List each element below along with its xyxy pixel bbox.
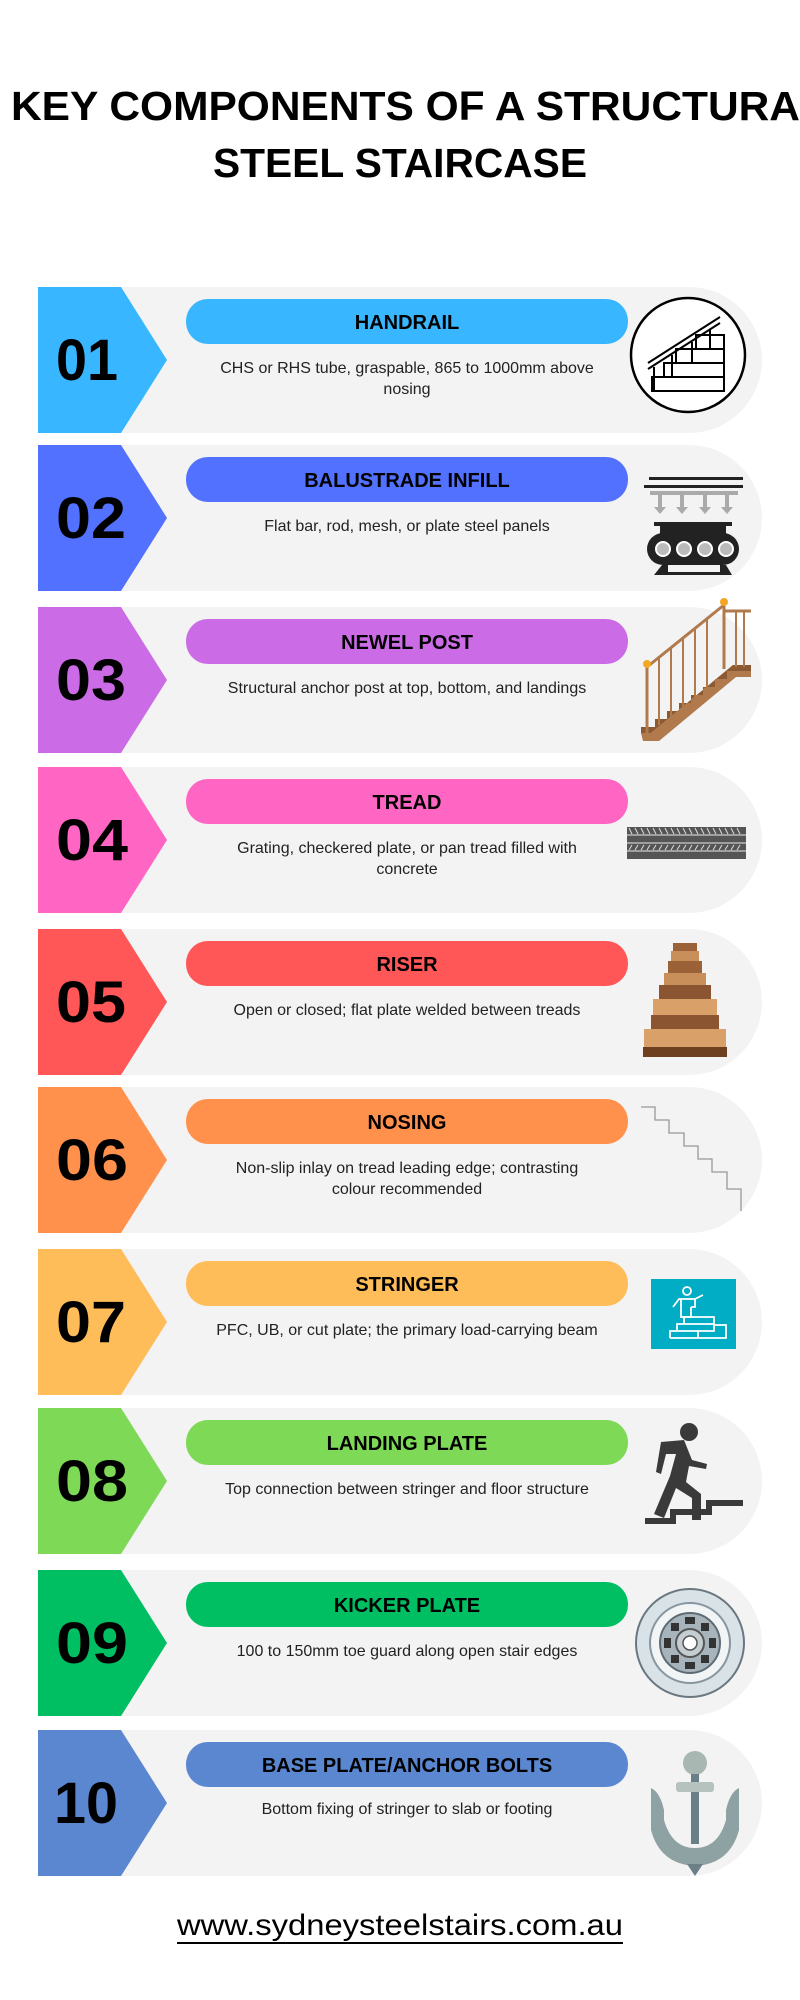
pill: KICKER PLATE [186, 1582, 628, 1627]
heading: TREAD: TREAD [373, 792, 441, 814]
title: STEEL STAIRCASE [213, 140, 587, 186]
icon: person climbing stairs [645, 1423, 743, 1524]
description 07: PFC, UB, or cut plate; the primary load-carrying beam [216, 1322, 598, 1339]
pill: TREAD [186, 779, 628, 824]
chevron 05 [38, 929, 167, 1075]
icon: teal stair climber [651, 1279, 736, 1349]
icon: grating strip [627, 827, 746, 859]
heading: NOSING: NOSING [368, 1112, 446, 1134]
number 04: 04 [56, 808, 128, 873]
title: KEY COMPONENTS OF A STRUCTURA [11, 83, 800, 129]
description 04: Grating, checkered plate, or pan tread filled with [237, 840, 577, 857]
number 03: 03 [56, 648, 126, 713]
chevron 09 [38, 1570, 167, 1716]
description 05: Open or closed; flat plate welded between treads [234, 1002, 580, 1019]
description 04: concrete [376, 861, 438, 878]
heading: HANDRAIL: HANDRAIL [355, 312, 459, 334]
pill: BALUSTRADE INFILL [186, 457, 628, 502]
number 07: 07 [56, 1290, 126, 1355]
number 01: 01 [56, 328, 118, 393]
panel: 05 riser [38, 929, 762, 1075]
number 10: 10 [54, 1771, 118, 1836]
pill: NEWEL POST [186, 619, 628, 664]
heading: LANDING PLATE: LANDING PLATE [327, 1433, 487, 1455]
description 06: colour recommended [332, 1181, 482, 1198]
heading: BASE PLATE/ANCHOR BOLTS: BASE PLATE/ANCHOR BOLTS [262, 1755, 552, 1777]
panel: 01 handrail [38, 287, 762, 433]
number 06: 06 [56, 1128, 128, 1193]
heading: STRINGER: STRINGER [355, 1274, 459, 1296]
description 06: Non-slip inlay on tread leading edge; contrasting [236, 1160, 578, 1177]
chevron 02 [38, 445, 167, 591]
icon: wooden riser stack [643, 943, 727, 1057]
icon: conveyor [644, 477, 743, 575]
number 05: 05 [56, 970, 126, 1035]
icon: anchor [651, 1751, 739, 1876]
pill: LANDING PLATE [186, 1420, 628, 1465]
chevron 04 [38, 767, 167, 913]
panel: 06 nosing [38, 1087, 762, 1233]
description 08: Top connection between stringer and floor structure [225, 1481, 589, 1498]
description 01: nosing [383, 381, 431, 398]
panel: 03 newel post [38, 598, 762, 753]
description 10: Bottom fixing of stringer to slab or footing [262, 1801, 552, 1818]
pill: HANDRAIL [186, 299, 628, 344]
number 08: 08 [56, 1449, 128, 1514]
chevron 03 [38, 607, 167, 753]
chevron 07 [38, 1249, 167, 1395]
icon: wooden staircase [641, 598, 751, 741]
description 03: Structural anchor post at top, bottom, and landings [228, 680, 586, 697]
icon: clutch disc [636, 1589, 744, 1697]
heading: BALUSTRADE INFILL: BALUSTRADE INFILL [304, 470, 510, 492]
pill: RISER [186, 941, 628, 986]
description 09: 100 to 150mm toe guard along open stair edges [237, 1643, 577, 1660]
description 01: CHS or RHS tube, graspable, 865 to 1000mm above [220, 360, 594, 377]
footer url: www.sydneysteelstairs.com.au [176, 1909, 623, 1942]
panel: 02 balustrade infill [38, 445, 762, 591]
number 02: 02 [56, 486, 126, 551]
chevron 08 [38, 1408, 167, 1554]
chevron 06 [38, 1087, 167, 1233]
icon: handrail stairs [631, 298, 745, 412]
panel: 10 base plate/anchor bolts [38, 1730, 762, 1876]
panel: 07 stringer [38, 1249, 762, 1395]
title [11, 83, 800, 186]
panel: 09 kicker plate [38, 1570, 762, 1716]
description 02: Flat bar, rod, mesh, or plate steel panels [264, 518, 550, 535]
pill: NOSING [186, 1099, 628, 1144]
icon: stair line [641, 1107, 741, 1211]
heading: RISER: RISER [376, 954, 438, 976]
heading: KICKER PLATE: KICKER PLATE [334, 1595, 480, 1617]
panel: 04 tread [38, 767, 762, 913]
pill: STRINGER [186, 1261, 628, 1306]
chevron 10 [38, 1730, 167, 1876]
pill: BASE PLATE/ANCHOR BOLTS [186, 1742, 628, 1787]
panel: 08 landing plate [38, 1408, 762, 1554]
chevron 01 [38, 287, 167, 433]
number 09: 09 [56, 1611, 128, 1676]
heading: NEWEL POST: NEWEL POST [341, 632, 473, 654]
